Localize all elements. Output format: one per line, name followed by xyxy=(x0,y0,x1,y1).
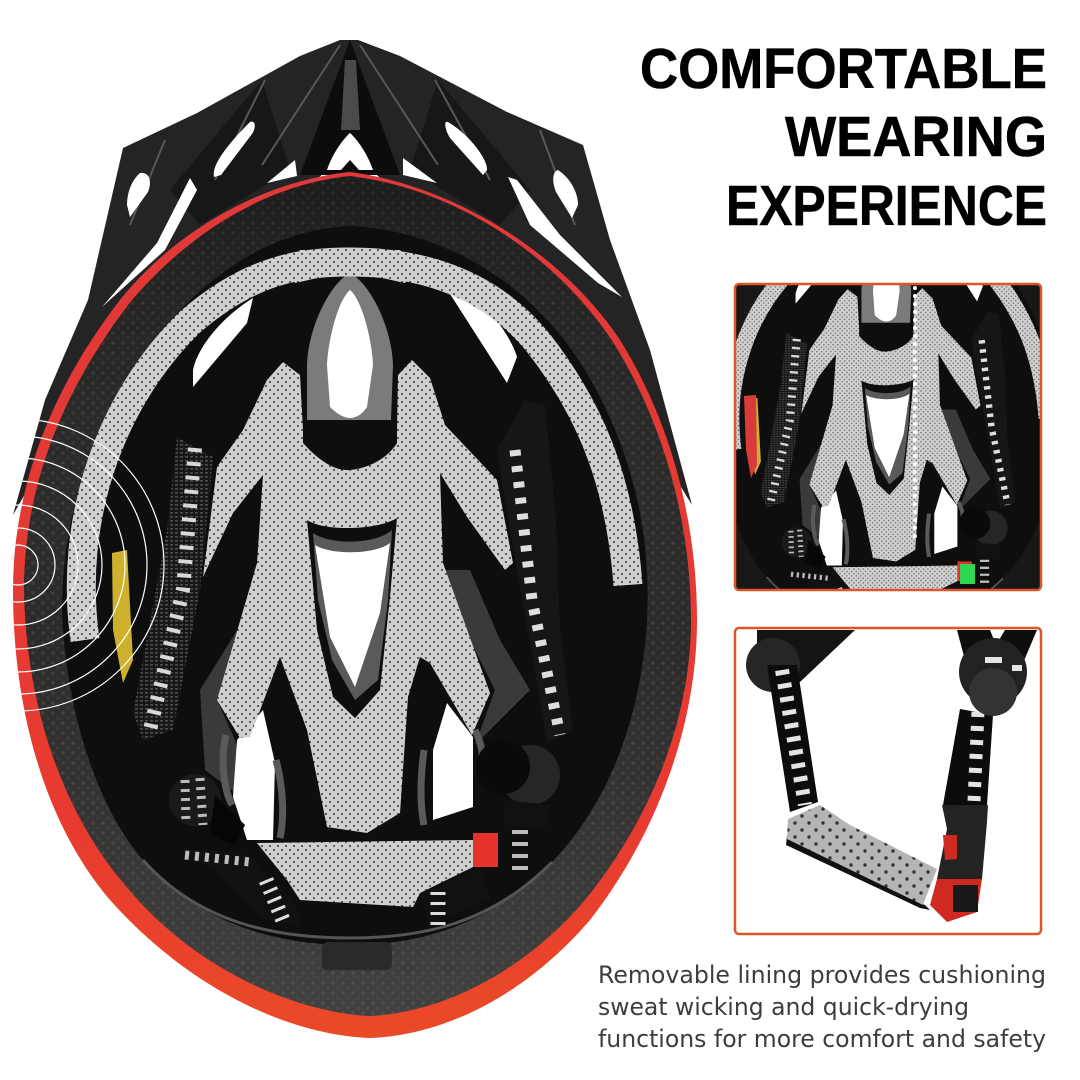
right dial xyxy=(959,638,1027,716)
centre mesh pad xyxy=(203,360,513,833)
helmet visor xyxy=(13,40,692,515)
panel: removable strap detail xyxy=(735,628,1041,934)
concentric rings xyxy=(0,419,164,711)
description xyxy=(598,961,1046,1053)
lower vent ribs xyxy=(223,730,482,838)
red outer shell xyxy=(13,172,697,1038)
detail reflector xyxy=(744,395,757,478)
rear left adjuster xyxy=(169,774,245,845)
removable pad xyxy=(786,805,937,910)
buckle red xyxy=(930,835,982,922)
green tab xyxy=(960,564,975,584)
rear mesh pad xyxy=(257,840,473,907)
inner helmet xyxy=(62,226,648,945)
inner black cavity xyxy=(62,226,648,945)
grey lining band xyxy=(81,262,628,640)
detail border xyxy=(735,284,1041,590)
lower straps xyxy=(180,830,520,925)
title: COMFORTABLE xyxy=(640,37,1047,101)
top left straps xyxy=(757,630,855,690)
title: WEARING xyxy=(785,105,1047,169)
panel: inner lining detail xyxy=(734,282,1042,592)
red buckle xyxy=(473,833,498,867)
panel border xyxy=(735,628,1041,934)
visor vents xyxy=(102,122,622,307)
top right straps xyxy=(957,630,1037,670)
centre pad opening xyxy=(307,518,397,718)
interior vents xyxy=(193,273,517,840)
left strap xyxy=(133,437,213,740)
rear clip xyxy=(322,942,392,970)
right harness strap xyxy=(943,709,993,805)
cavity rim xyxy=(143,860,552,938)
right strap xyxy=(497,400,573,743)
vent upper xyxy=(193,283,517,840)
detail helmet view xyxy=(736,285,1040,589)
title xyxy=(640,37,1047,238)
buckle inset xyxy=(953,885,978,912)
description: functions for more comfort and safety xyxy=(598,1025,1046,1053)
buckle xyxy=(937,805,988,879)
foam ring xyxy=(24,176,691,1016)
yellow reflector xyxy=(112,550,133,683)
description: Removable lining provides cushioning xyxy=(598,961,1046,989)
dotted seam xyxy=(913,288,917,540)
description: sweat wicking and quick-drying xyxy=(598,993,969,1021)
lining centre bulge xyxy=(290,250,415,283)
left harness strap xyxy=(767,665,818,812)
vent surround xyxy=(307,273,393,420)
lower vents xyxy=(233,710,275,840)
adjuster dial xyxy=(476,740,560,830)
helmet photo xyxy=(0,40,697,1038)
left dial xyxy=(746,638,800,692)
interior foam lumps xyxy=(200,570,530,800)
